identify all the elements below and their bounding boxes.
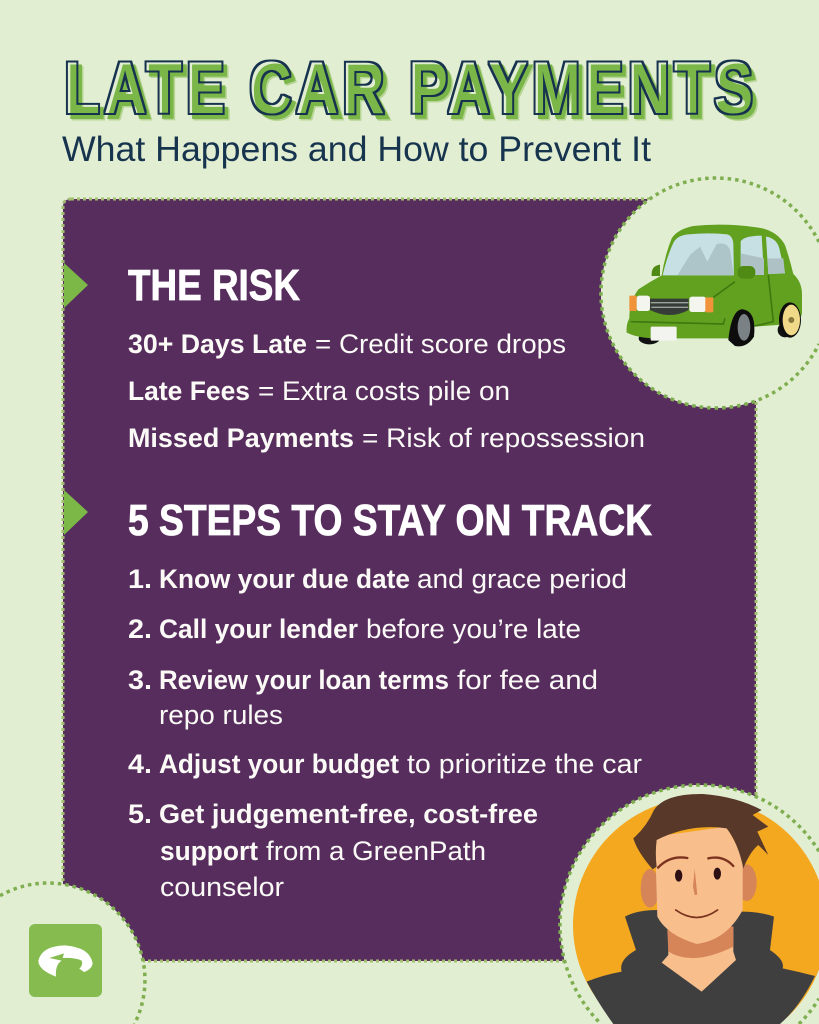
badge: car circle [601,178,819,408]
steps list: for fee and [457,665,598,695]
steps list: support [160,836,258,866]
icon: section arrow risk [64,263,88,308]
steps list: 1. [128,564,152,594]
risk list: 30+ Days Late [128,329,307,359]
steps list: and grace period [417,564,627,594]
steps list: from a GreenPath [266,836,486,866]
heading: the risk: THE RISK [128,261,300,310]
icon: section arrow steps [64,490,88,535]
steps list: Know your due date [159,564,410,594]
risk list: Missed Payments [128,423,354,453]
steps list: Adjust your budget [159,749,399,779]
icon: GreenPath logo [29,924,102,997]
panel: purple content background [63,199,756,961]
badge: person circle [560,785,819,1024]
steps list: 2. [128,614,152,644]
icon: green car [627,225,802,346]
badge: logo circle [0,883,145,1024]
steps list: 5. [128,799,152,829]
risk list: = Extra costs pile on [258,376,510,406]
risk list: Late Fees [128,376,250,406]
steps list [128,564,642,902]
heading: 5 steps: 5 STEPS TO STAY ON TRACK [128,496,652,545]
steps list: to prioritize the car [407,749,642,779]
risk list: = Risk of repossession [362,423,645,453]
steps list: before you’re late [366,614,581,644]
steps list: 3. [128,665,152,695]
steps list: Call your lender [159,614,358,644]
subtitle: What Happens and How to Prevent It [62,130,651,169]
risk list: = Credit score drops [315,329,566,359]
risk list [128,329,645,453]
steps list: Review your loan terms [159,665,449,695]
steps list: 4. [128,749,152,779]
icon: smiling man portrait [573,794,819,1024]
steps list: counselor [160,872,284,902]
steps list: Get judgement-free, cost-free [159,799,538,829]
steps list: repo rules [159,700,283,730]
